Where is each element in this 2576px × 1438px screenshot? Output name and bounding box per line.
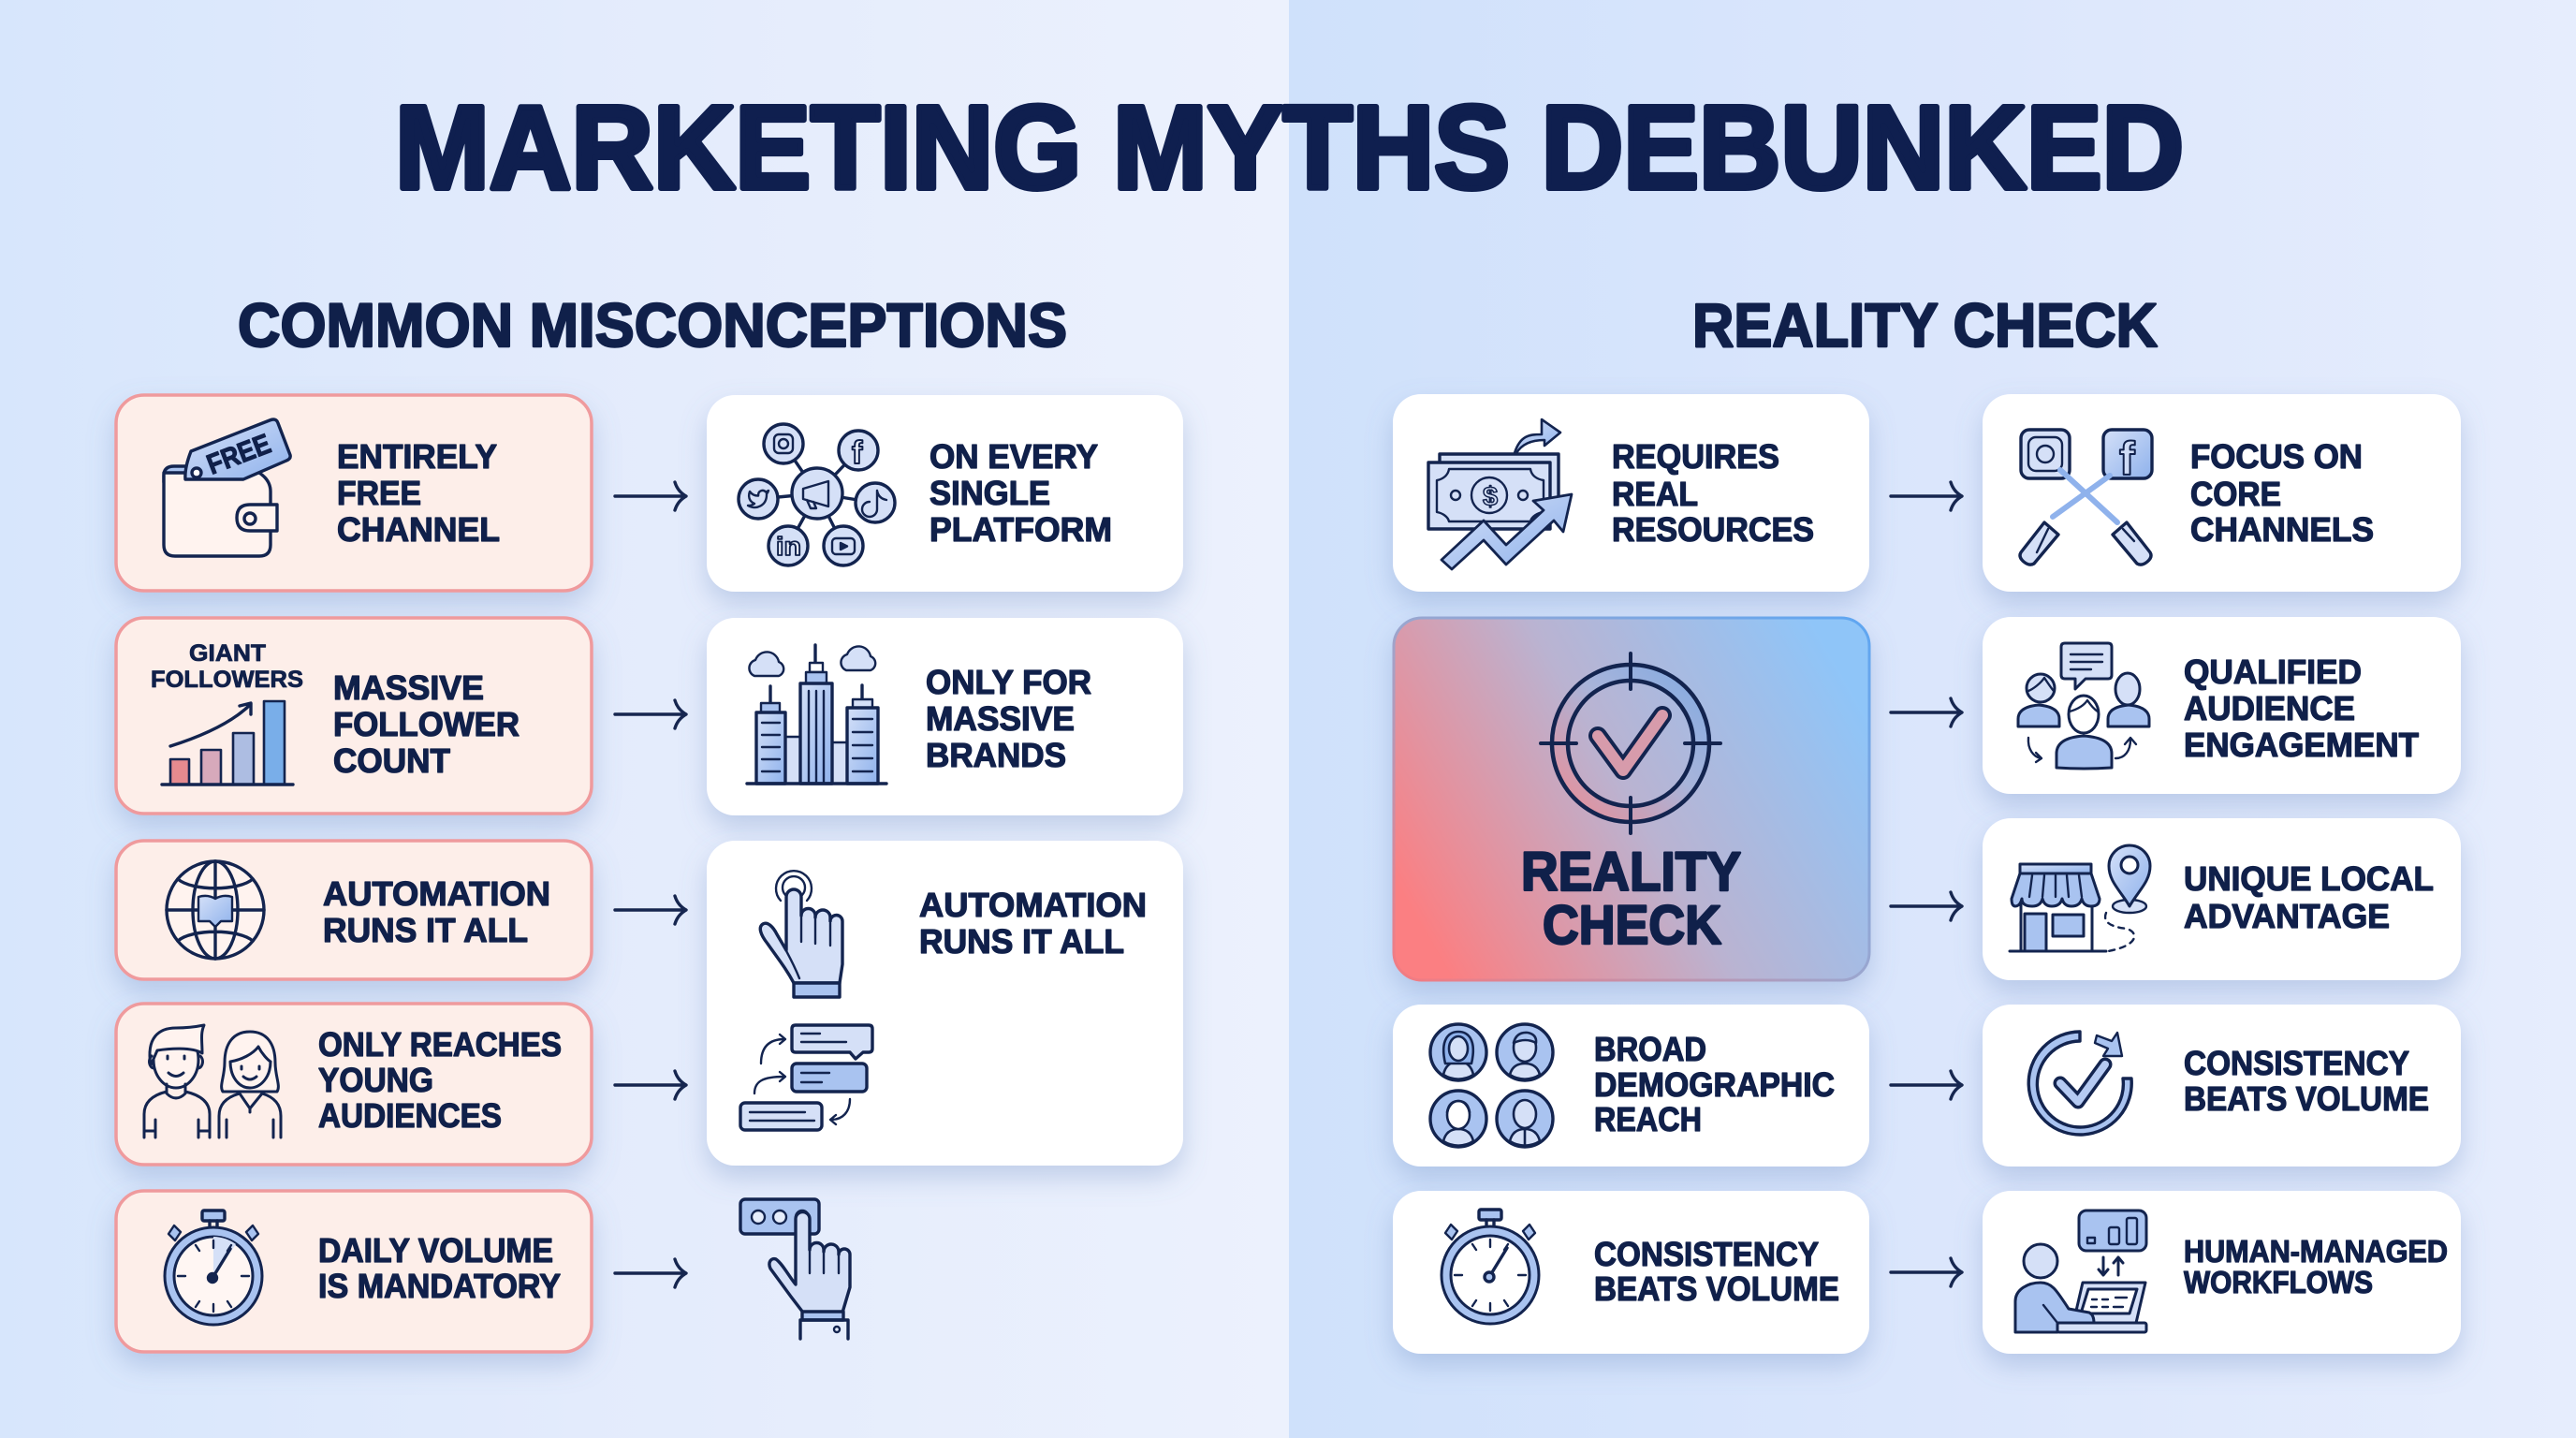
- label: only for massive brands: MASSIVE: [926, 699, 1075, 738]
- label: automation runs it all: AUTOMATION: [323, 874, 550, 913]
- label: qualified audience engagement: AUDIENCE: [2184, 689, 2355, 727]
- label: massive follower count: COUNT: [333, 741, 450, 780]
- background: left half: [0, 0, 1289, 1438]
- background: right half: [1289, 0, 2576, 1438]
- label: consistency beats volume: [1594, 1235, 1839, 1308]
- panel: qualified audience engagement: [1983, 617, 2461, 794]
- icon: social network hub: [739, 424, 895, 565]
- panel: automation runs it all (misconception): [116, 841, 592, 979]
- label: entirely free channel: CHANNEL: [337, 510, 500, 549]
- label: massive follower count: MASSIVE: [333, 668, 484, 707]
- label: only for massive brands: ONLY FOR: [926, 663, 1091, 701]
- label: unique local advantage: UNIQUE LOCAL: [2184, 859, 2434, 898]
- label: qualified audience engagement: [2184, 653, 2419, 764]
- label: only reaches young audiences: AUDIENCES: [318, 1096, 502, 1135]
- label: only reaches young audiences: ONLY REACHES: [318, 1025, 562, 1064]
- icon: city skyline: [747, 645, 886, 784]
- label: automation runs it all: RUNS IT ALL: [919, 922, 1124, 961]
- label: consistency beats volume: BEATS VOLUME: [1594, 1269, 1839, 1308]
- label: only for massive brands: [926, 663, 1091, 774]
- label: automation runs it all: RUNS IT ALL: [323, 911, 528, 949]
- label: on every single platform: [929, 437, 1112, 549]
- label: on every single platform: SINGLE: [929, 474, 1050, 512]
- label: requires real resources: REQUIRES: [1612, 437, 1779, 476]
- label: only reaches young audiences: YOUNG: [318, 1061, 433, 1099]
- label: consistency beats volume: BEATS VOLUME: [2184, 1079, 2429, 1118]
- label: broad demographic reach: DEMOGRAPHIC: [1594, 1065, 1835, 1104]
- icon: touch hand: [760, 871, 842, 997]
- icon: chat bubbles flow: [740, 1025, 872, 1130]
- label: focus on core channels: CORE: [2190, 475, 2281, 513]
- icon: shop and location pin: [2010, 845, 2150, 951]
- label: qualified audience engagement: ENGAGEMENT: [2184, 726, 2419, 764]
- icon: stopwatch: [1442, 1210, 1539, 1324]
- panel: consistency beats volume with stopwatch: [1393, 1191, 1869, 1354]
- title: MARKETING MYTHS DEBUNKED: [395, 81, 2184, 213]
- icon: four demographic portraits: [1430, 1024, 1553, 1147]
- label: entirely free channel: ENTIRELY: [337, 437, 497, 476]
- label: daily volume is mandatory: IS MANDATORY: [318, 1267, 561, 1305]
- label: broad demographic reach: BROAD: [1594, 1030, 1706, 1068]
- icon: person at laptop with dashboard: [2015, 1211, 2146, 1332]
- icon: money and growth arrow: $: [1483, 482, 1498, 512]
- panel: entirely free channel: [116, 395, 592, 591]
- label: reality check: CHECK: [1543, 895, 1721, 956]
- label: automation runs it all: AUTOMATION: [919, 886, 1147, 924]
- label: reality check: REALITY: [1521, 842, 1741, 902]
- panel: unique local advantage: [1983, 818, 2461, 980]
- panel: on every single platform: [707, 395, 1183, 592]
- label: reality check: [1521, 842, 1741, 956]
- label: focus on core channels: FOCUS ON: [2190, 437, 2363, 476]
- label: human-managed workflows: HUMAN-MANAGED: [2184, 1234, 2448, 1269]
- heading: reality check: REALITY CHECK: [1692, 290, 2158, 360]
- panel: broad demographic reach: [1393, 1005, 1869, 1167]
- label: focus on core channels: [2190, 437, 2374, 549]
- panel: only for massive brands: [707, 618, 1183, 815]
- label: broad demographic reach: REACH: [1594, 1100, 1702, 1138]
- label: on every single platform: ON EVERY: [929, 437, 1098, 476]
- label: requires real resources: REAL: [1612, 475, 1698, 513]
- icon: young man and woman: [144, 1025, 281, 1137]
- arrow: [1891, 482, 1962, 510]
- label: human-managed workflows: WORKFLOWS: [2184, 1265, 2373, 1299]
- panel: automation runs it all (large white): [707, 841, 1183, 1166]
- label: qualified audience engagement: QUALIFIED: [2184, 653, 2362, 691]
- label: consistency beats volume: [2184, 1044, 2429, 1118]
- icon: audience group with speech bubble: [2018, 643, 2149, 769]
- icon: follower bar chart: [162, 701, 293, 785]
- icon: crossed beams on instagram and facebook: [2020, 430, 2152, 565]
- panel: reality check highlight: [1394, 618, 1869, 980]
- arrow: [1891, 892, 1962, 920]
- icon: money and growth arrow: [1428, 419, 1572, 569]
- label: consistency beats volume: CONSISTENCY: [2184, 1044, 2409, 1082]
- icon label: giant followers: FOLLOWERS: [151, 667, 303, 693]
- label: daily volume is mandatory: DAILY VOLUME: [318, 1231, 553, 1269]
- label: human-managed workflows: [2184, 1234, 2448, 1299]
- icon: crossed beams on instagram and facebook: f: [2119, 433, 2135, 485]
- icon: hand pressing buttons: [740, 1199, 850, 1339]
- icon: globe with book: [167, 861, 264, 959]
- label: broad demographic reach: [1594, 1030, 1835, 1138]
- label: automation runs it all: [919, 886, 1147, 961]
- icon: wallet with free tag: FREE: [203, 429, 275, 481]
- icon: circular check: [2028, 1032, 2131, 1135]
- arrow: [1891, 1071, 1962, 1099]
- icon label: giant followers: GIANT: [189, 640, 266, 667]
- label: requires real resources: RESOURCES: [1612, 510, 1814, 549]
- panel: human-managed workflows: [1983, 1191, 2461, 1354]
- icon: wallet with free tag: [164, 419, 290, 556]
- arrow: [1891, 1258, 1962, 1286]
- panel: massive follower count: [116, 618, 592, 814]
- label: massive follower count: FOLLOWER: [333, 705, 520, 743]
- panel: focus on core channels: [1983, 394, 2461, 592]
- label: focus on core channels: CHANNELS: [2190, 510, 2374, 549]
- icon: social network hub: f: [852, 435, 863, 471]
- arrow: [615, 700, 686, 728]
- heading: common misconceptions: COMMON MISCONCEPTIONS: [238, 290, 1067, 360]
- label: daily volume is mandatory: [318, 1231, 561, 1305]
- panel: consistency beats volume with loop check: [1983, 1005, 2461, 1167]
- label: only for massive brands: BRANDS: [926, 736, 1066, 774]
- icon label: giant followers: [151, 640, 303, 693]
- label: only reaches young audiences: [318, 1025, 562, 1135]
- label: consistency beats volume: CONSISTENCY: [1594, 1235, 1819, 1273]
- icon: target with check mark: [1541, 653, 1720, 833]
- icon: stopwatch: [165, 1211, 262, 1325]
- label: unique local advantage: ADVANTAGE: [2184, 897, 2390, 935]
- panel: only reaches young audiences: [116, 1004, 592, 1165]
- label: massive follower count: [333, 668, 520, 780]
- arrow: [615, 896, 686, 924]
- arrow: [615, 482, 686, 510]
- panel: daily volume is mandatory: [116, 1191, 592, 1352]
- label: on every single platform: PLATFORM: [929, 510, 1112, 549]
- arrow: [615, 1071, 686, 1099]
- icon: social network hub: in: [776, 532, 801, 561]
- arrow: [615, 1259, 686, 1287]
- label: requires real resources: [1612, 437, 1814, 549]
- label: unique local advantage: [2184, 859, 2434, 935]
- panel: requires real resources: [1393, 394, 1869, 592]
- arrow: [1891, 698, 1962, 726]
- label: automation runs it all: [323, 874, 550, 949]
- label: entirely free channel: FREE: [337, 474, 421, 512]
- label: entirely free channel: [337, 437, 500, 549]
